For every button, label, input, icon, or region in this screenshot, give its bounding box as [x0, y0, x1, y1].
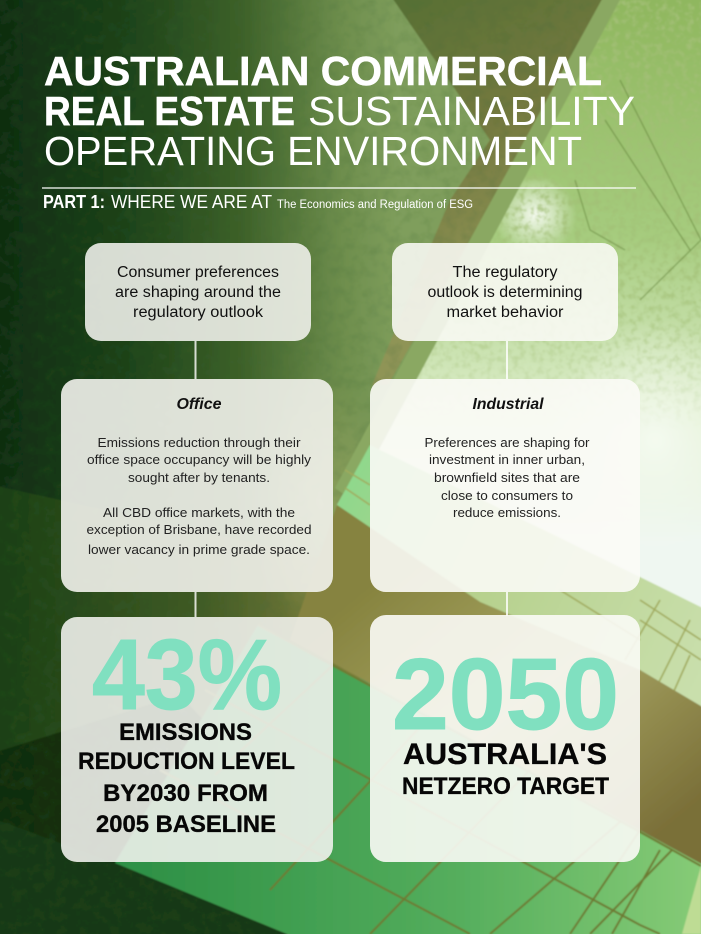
panel: industrial: Industrial — [472, 396, 544, 413]
panel: office — [61, 379, 333, 592]
panel: 2050 statistic — [370, 615, 640, 862]
panel: industrial: close to consumers to — [441, 488, 573, 503]
panel: consumer preferences: are shaping around the — [115, 284, 281, 301]
panel: industrial — [370, 379, 640, 592]
panel: industrial: reduce emissions. — [453, 505, 561, 520]
panel: office: Emissions reduction through their — [98, 435, 301, 450]
panel: 43% statistic: BY2030 FROM — [103, 780, 268, 807]
title: OPERATING ENVIRONMENT — [44, 128, 582, 174]
title — [44, 48, 635, 174]
panel: office: All CBD office markets, with the — [103, 505, 295, 520]
subtitle: part 1 — [43, 192, 473, 212]
subtitle: part 1: The Economics and Regulation of ESG — [277, 199, 473, 211]
panel: regulatory outlook — [392, 243, 618, 341]
panel: consumer preferences — [85, 243, 311, 341]
panel: 2050 statistic: NETZERO TARGET — [402, 773, 609, 800]
panel: consumer preferences: regulatory outlook — [133, 304, 263, 321]
panel: office: Office — [176, 396, 222, 413]
title: SUSTAINABILITY — [308, 88, 635, 134]
panel: industrial: Preferences are shaping for — [424, 435, 590, 450]
panel: 2050 statistic: AUSTRALIA'S — [403, 738, 607, 771]
panel: office: office space occupancy will be highly — [87, 452, 311, 467]
subtitle: part 1: PART 1: — [43, 192, 105, 212]
panel: 43% statistic: 2005 BASELINE — [96, 811, 276, 838]
panel: 43% statistic: REDUCTION LEVEL — [78, 748, 295, 775]
panel: 43% statistic — [61, 617, 333, 862]
panel: office: sought after by tenants. — [128, 470, 270, 485]
panel: industrial: investment in inner urban, — [429, 452, 585, 467]
panel: regulatory outlook: market behavior — [446, 304, 564, 321]
panel: office: lower vacancy in prime grade space. — [88, 542, 310, 557]
panel: regulatory outlook: The regulatory — [452, 264, 558, 281]
title: REAL ESTATE — [44, 88, 295, 134]
panel: industrial: brownfield sites that are — [434, 470, 580, 485]
panel: consumer preferences: Consumer preferences — [117, 264, 279, 281]
title: AUSTRALIAN COMMERCIAL — [44, 48, 602, 94]
panel: 2050 statistic: 2050 — [392, 639, 619, 751]
panel: regulatory outlook: outlook is determining — [428, 284, 582, 301]
subtitle: part 1: WHERE WE ARE AT — [111, 192, 272, 212]
panel: office: exception of Brisbane, have recorded — [86, 522, 312, 537]
connector lines — [194, 341, 508, 617]
panel: 43% statistic: 43% — [92, 619, 282, 731]
panel: 43% statistic: EMISSIONS — [119, 719, 252, 746]
